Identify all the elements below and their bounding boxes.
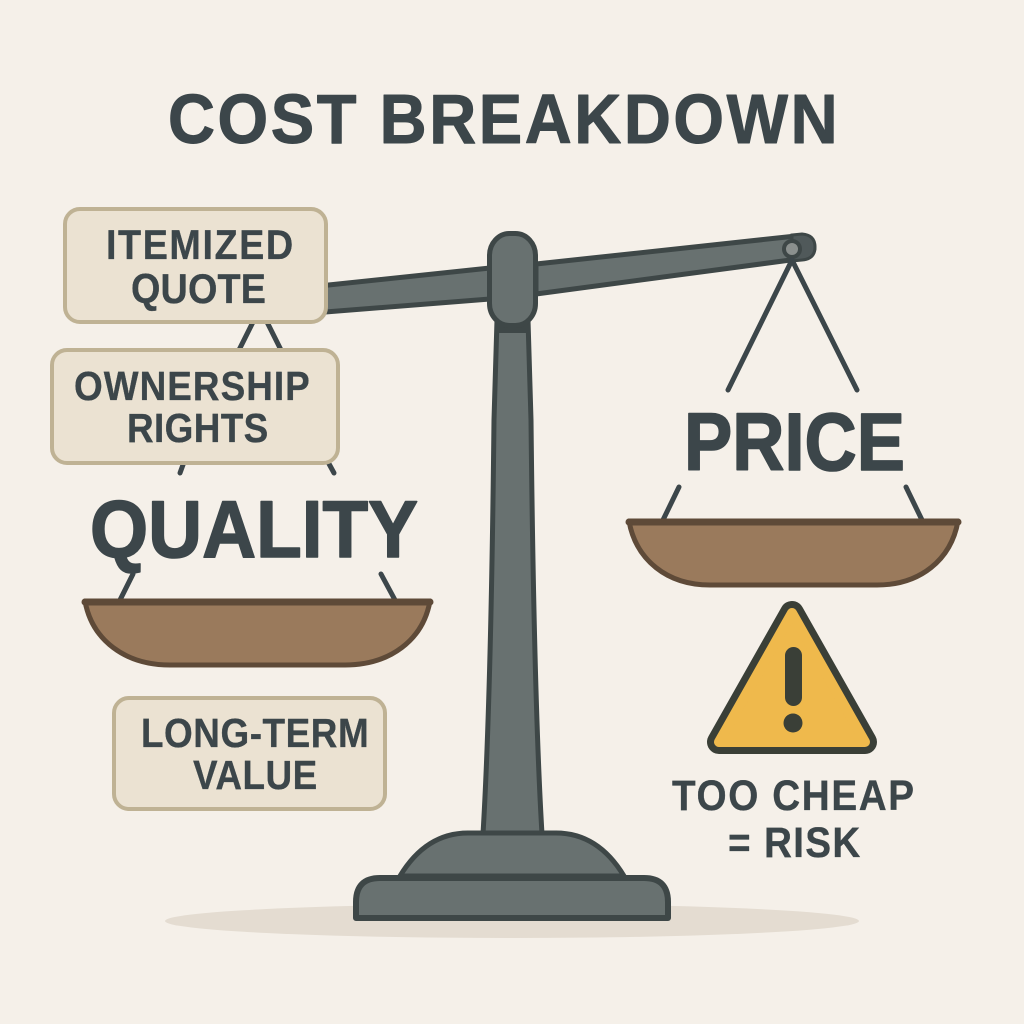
box: itemized quote: ITEMIZED bbox=[106, 222, 293, 268]
label: quality: QUALITY bbox=[90, 485, 418, 575]
warning text: = RISK bbox=[728, 818, 861, 866]
box: ownership rights bbox=[52, 350, 338, 463]
warning text bbox=[672, 771, 914, 866]
right pan strings bbox=[663, 260, 922, 520]
title: COST BREAKDOWN bbox=[168, 81, 838, 159]
box: itemized quote: QUOTE bbox=[131, 266, 266, 312]
beam: left arm bbox=[300, 268, 490, 314]
box: itemized quote bbox=[65, 209, 326, 322]
box: ownership rights: OWNERSHIP bbox=[74, 364, 310, 409]
right pan bbox=[629, 521, 958, 585]
beam: right arm bbox=[536, 236, 814, 294]
box: long-term value bbox=[114, 698, 385, 809]
beam pivot pin bbox=[784, 241, 800, 257]
beam end cap bbox=[792, 234, 815, 261]
scale stand and beam bbox=[300, 234, 815, 918]
hub bbox=[490, 234, 536, 326]
ground shadow bbox=[165, 904, 859, 938]
icon: warning triangle bbox=[719, 613, 865, 742]
collar under hub bbox=[495, 318, 530, 333]
base dome bbox=[400, 833, 624, 876]
warning text: TOO CHEAP bbox=[672, 771, 914, 819]
base plate bbox=[356, 878, 668, 918]
left pan strings bbox=[120, 322, 395, 600]
column bbox=[483, 320, 542, 834]
label: price: PRICE bbox=[684, 397, 905, 488]
box: long-term value: LONG-TERM bbox=[141, 711, 369, 756]
box: long-term value: VALUE bbox=[193, 753, 317, 798]
box: ownership rights: RIGHTS bbox=[127, 406, 268, 451]
left pan bbox=[85, 601, 430, 665]
